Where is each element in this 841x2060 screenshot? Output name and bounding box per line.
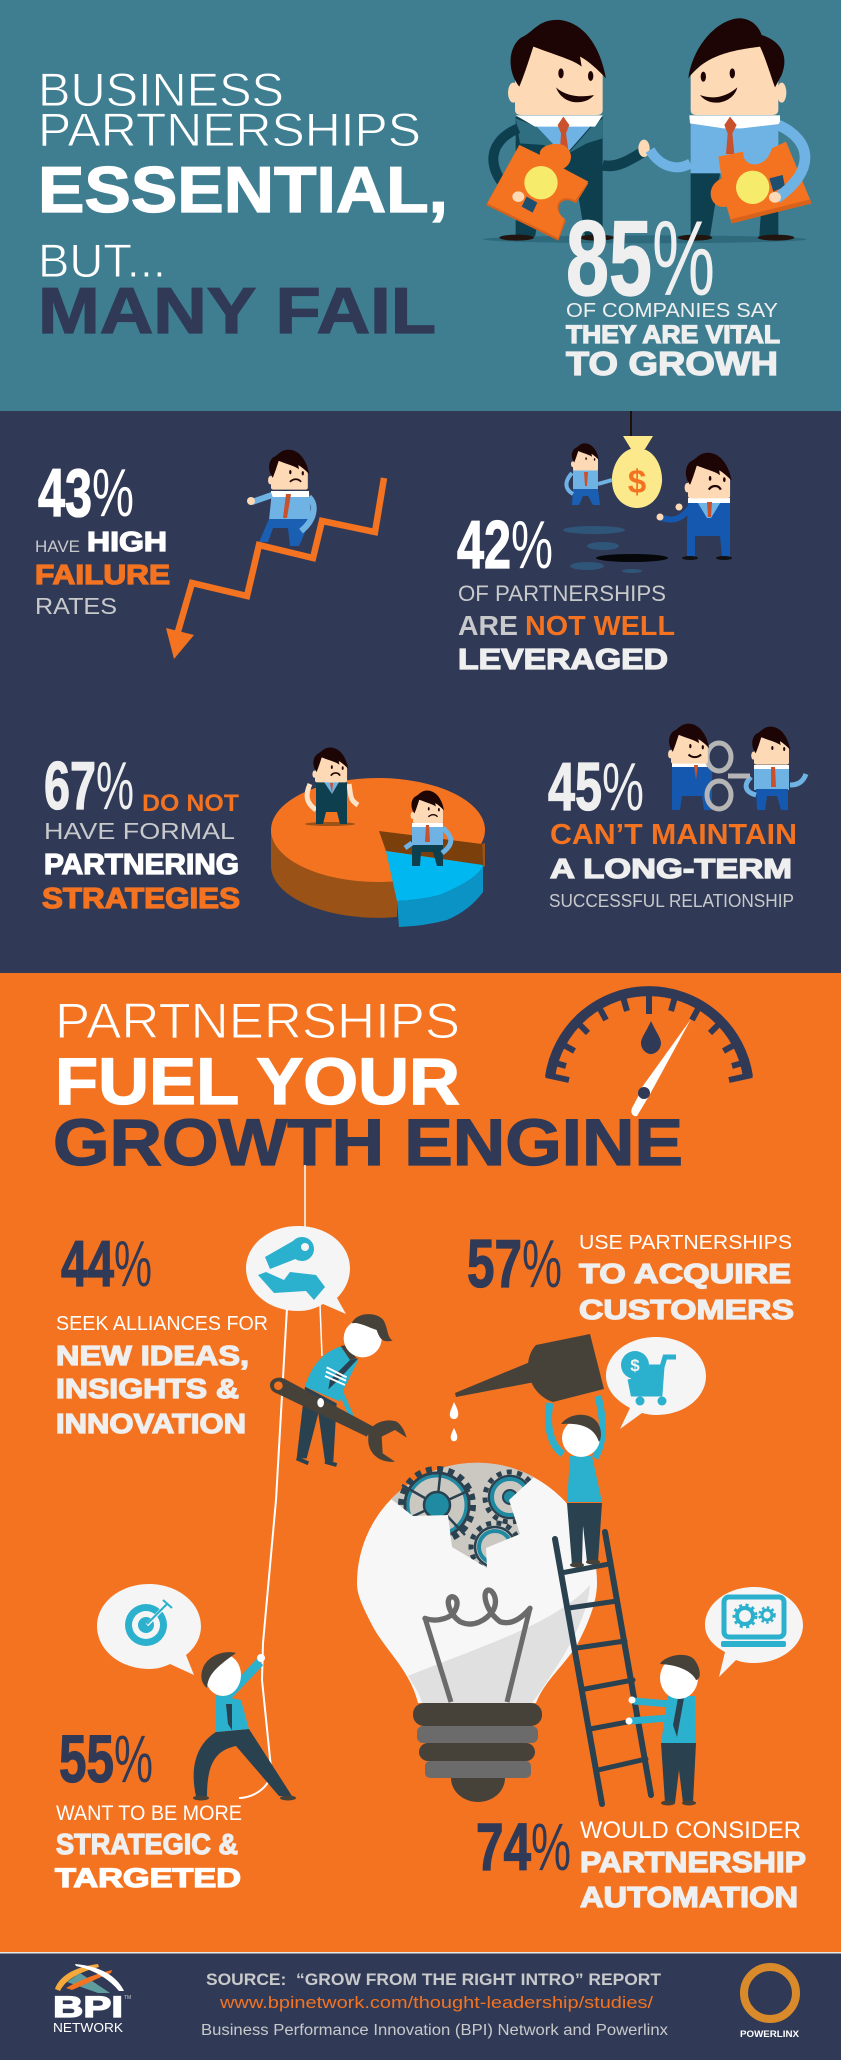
stat: 67 percent no formal strategies xyxy=(42,748,240,915)
stat: 44 percent new ideas: 44 xyxy=(61,1227,114,1300)
stat: 42 percent not well leveraged: LEVERAGED xyxy=(458,644,668,676)
illustration: two businessmen shaking hands holding puzzle pieces xyxy=(483,18,812,243)
stat: 57 percent acquire customers: 57 xyxy=(467,1226,522,1302)
stat: 74 percent partnership automation: % xyxy=(531,1810,571,1885)
logo: BPI Network xyxy=(53,1964,131,2035)
stat: 45 percent can't maintain relationship xyxy=(548,749,797,911)
stat: 42 percent not well leveraged: ARE xyxy=(458,610,518,641)
stat: 55 percent strategic and targeted: TARGETED xyxy=(55,1863,241,1893)
stat: 45 percent can't maintain relationship: % xyxy=(602,749,644,825)
logo: Powerlinx: POWERLINX xyxy=(740,2029,799,2039)
illustration: worried man on the arrow xyxy=(247,450,314,546)
logo: BPI Network: BPI xyxy=(53,1991,123,2024)
title: business partnerships essential: BUSINESS xyxy=(38,63,284,116)
title: business partnerships essential: ESSENTIAL, xyxy=(38,153,448,226)
stat: 45 percent can't maintain relationship: SUCCESSFUL RELATIONSHIP xyxy=(549,891,794,911)
stat: 74 percent partnership automation xyxy=(476,1810,806,1914)
stat: 67 percent no formal strategies: STRATEGIES xyxy=(42,883,240,915)
panel: why partnerships fail xyxy=(0,411,841,974)
stat: 74 percent partnership automation: WOULD CONSIDER xyxy=(580,1817,801,1844)
stat: 44 percent new ideas xyxy=(56,1227,268,1439)
stat: 57 percent acquire customers: % xyxy=(522,1226,562,1302)
title: partnerships fuel your growth engine: GROWTH ENGINE xyxy=(53,1105,683,1179)
illustration: men chasing money bag over a hole xyxy=(563,411,732,573)
stat: 67 percent no formal strategies: PARTNERING xyxy=(44,849,239,881)
stat: 42 percent not well leveraged: % xyxy=(511,507,553,583)
stat: 85 percent of companies: TO GROWH xyxy=(566,345,778,382)
stat: 43 percent high failure rates xyxy=(35,455,170,619)
stat: 44 percent new ideas: SEEK ALLIANCES FOR xyxy=(56,1313,268,1335)
stat: 44 percent new ideas: NEW IDEAS, xyxy=(56,1340,249,1371)
speech bubble: key and hand xyxy=(246,1226,350,1314)
text: source credit xyxy=(201,1971,668,2039)
text: source credit: www.bpinetwork.com/thought-leadership/studies/ xyxy=(219,1993,653,2012)
icon: fuel gauge xyxy=(546,991,752,1116)
speech bubble: shopping cart: $ xyxy=(630,1356,640,1375)
stat: 67 percent no formal strategies: 67 xyxy=(44,748,96,824)
logo: Powerlinx xyxy=(740,1967,799,2039)
title: business partnerships essential: PARTNERSHIPS xyxy=(38,103,421,156)
speech bubble: target with arrow xyxy=(97,1584,201,1675)
stat: 42 percent not well leveraged xyxy=(457,507,675,676)
stat: 85 percent of companies xyxy=(566,198,780,382)
stat: 85 percent of companies: OF COMPANIES SAY xyxy=(566,300,778,322)
arrow: falling zig-zag xyxy=(166,478,384,659)
stat: 55 percent strategic and targeted: STRATEGIC & xyxy=(56,1829,238,1861)
text: source credit: Business Performance Innovation (BPI) Network and Powerlinx xyxy=(201,2022,668,2039)
illustration: angry man standing on the pie xyxy=(305,748,358,826)
illustration: two men with a wind-up key xyxy=(668,724,806,810)
stat: 67 percent no formal strategies: DO NOT xyxy=(142,790,239,817)
logo: BPI Network: TM xyxy=(124,1995,131,2001)
stat: 67 percent no formal strategies: % xyxy=(96,748,134,824)
stat: 43 percent high failure rates: 43 xyxy=(38,455,92,531)
illustration: man pulling the rope xyxy=(193,1652,296,1800)
stat: 55 percent strategic and targeted: WANT TO BE MORE xyxy=(56,1802,242,1825)
panel: footer xyxy=(0,1952,841,2060)
panel: header xyxy=(0,0,841,412)
illustration: man on ladder holding the oil can xyxy=(549,1396,603,1568)
panel: fuel your growth engine xyxy=(0,973,841,1952)
stat: 42 percent not well leveraged: OF PARTNERSHIPS xyxy=(458,581,666,606)
illustration: man steadying the ladder xyxy=(626,1655,700,1806)
stat: 43 percent high failure rates: FAILURE xyxy=(35,559,170,590)
stat: 44 percent new ideas: INNOVATION xyxy=(56,1408,246,1439)
stat: 45 percent can't maintain relationship: A LONG-TERM xyxy=(550,853,792,884)
speech bubble: computer with gears xyxy=(705,1587,803,1677)
speech bubble: shopping cart xyxy=(606,1337,706,1429)
stat: 42 percent not well leveraged: 42 xyxy=(457,507,511,583)
stat: 57 percent acquire customers: USE PARTNERSHIPS xyxy=(579,1232,792,1254)
stat: 43 percent high failure rates: HAVE xyxy=(35,537,80,556)
title: partnerships fuel your growth engine: PARTNERSHIPS xyxy=(55,993,460,1049)
illustration: ladder xyxy=(555,1532,651,1804)
stat: 57 percent acquire customers xyxy=(467,1226,794,1325)
stat: 85 percent of companies: THEY ARE VITAL xyxy=(566,321,780,349)
stat: 55 percent strategic and targeted xyxy=(55,1722,242,1893)
illustration: oil can and drops xyxy=(450,1334,604,1441)
stat: 43 percent high failure rates: RATES xyxy=(35,593,117,619)
title: business partnerships essential: MANY FAIL xyxy=(38,274,436,347)
title: partnerships fuel your growth engine: FUEL YOUR xyxy=(55,1044,460,1118)
stat: 55 percent strategic and targeted: % xyxy=(114,1722,153,1797)
stat: 67 percent no formal strategies: HAVE FORMAL xyxy=(44,818,235,844)
text: source credit: SOURCE: “GROW FROM THE RIGHT INTRO” REPORT xyxy=(206,1971,661,1989)
stat: 85 percent of companies: % xyxy=(652,198,715,318)
stat: 57 percent acquire customers: TO ACQUIRE xyxy=(579,1258,791,1289)
stat: 74 percent partnership automation: AUTOMATION xyxy=(580,1882,798,1914)
title: business partnerships essential: BUT... xyxy=(38,234,166,287)
stat: 45 percent can't maintain relationship: CAN’T MAINTAIN xyxy=(550,819,797,851)
illustration: man carrying a giant wrench xyxy=(270,1314,407,1465)
ropes from headline through the bubble xyxy=(239,1165,322,1798)
stat: 74 percent partnership automation: PARTNERSHIP xyxy=(580,1847,806,1879)
logo: BPI Network: NETWORK xyxy=(53,2021,124,2035)
stat: 85 percent of companies: 85 xyxy=(566,198,652,318)
illustration: sad man standing on the slice xyxy=(405,791,451,866)
stat: 74 percent partnership automation: 74 xyxy=(476,1810,531,1885)
title: partnerships fuel your growth engine xyxy=(53,993,683,1179)
title: business partnerships essential xyxy=(38,63,448,347)
stat: 45 percent can't maintain relationship: 45 xyxy=(548,749,602,825)
chart: pie with a cut-out slice xyxy=(271,778,485,927)
stat: 44 percent new ideas: INSIGHTS & xyxy=(56,1373,239,1404)
stat: 55 percent strategic and targeted: 55 xyxy=(59,1722,114,1797)
illustration: men chasing money bag over a hole: $ xyxy=(628,463,646,500)
stat: 44 percent new ideas: % xyxy=(114,1227,152,1300)
stat: 43 percent high failure rates: HIGH xyxy=(87,526,167,557)
stat: 57 percent acquire customers: CUSTOMERS xyxy=(579,1294,794,1325)
stat: 43 percent high failure rates: % xyxy=(92,455,134,531)
stat: 42 percent not well leveraged: NOT WELL xyxy=(525,610,675,641)
illustration: cracked light bulb with gears xyxy=(357,1463,597,1802)
